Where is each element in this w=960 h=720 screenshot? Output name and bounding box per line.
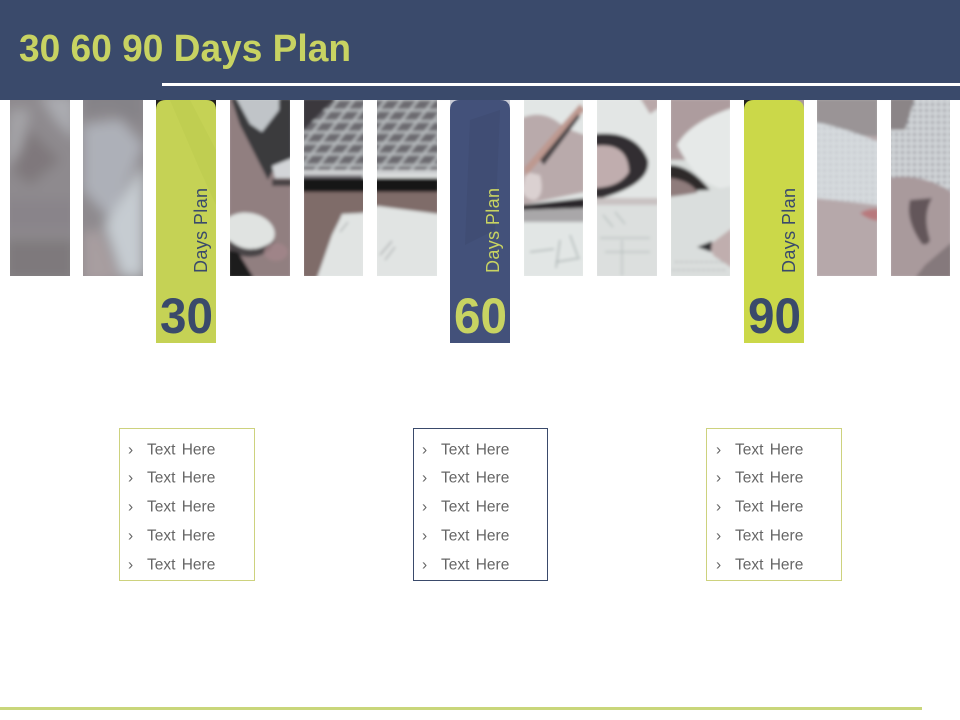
list box: 60 days: › (422, 470, 427, 486)
banner label: Days Plan (191, 188, 211, 273)
list box: 60 days: › (422, 528, 427, 544)
list box: 60 days: Text Here (441, 442, 509, 458)
header band (0, 0, 960, 100)
photo strip: cuff and pencil (669, 98, 732, 278)
banner: 60 days (450, 100, 510, 344)
title: 30 60 90 Days Plan (19, 28, 351, 70)
list box: 90 days: Text Here (735, 470, 803, 486)
list box: 30 days: Text Here (147, 442, 215, 458)
list box: 30 days: Text Here (147, 470, 215, 486)
photo strip: shirt and hand (815, 98, 879, 278)
list box: 90 days: › (716, 528, 721, 544)
list box: 90 days: Text Here (735, 528, 803, 544)
list box: 30 days: › (128, 528, 133, 544)
list box: 60 days: Text Here (441, 528, 509, 544)
list box: 30 days (120, 428, 254, 580)
banner label: Days Plan (483, 188, 503, 273)
list box: 30 days: Text Here (147, 556, 215, 574)
photo strips: laptop and hands on desk (10, 100, 950, 276)
photo strip: laptop lid and desk (230, 100, 290, 276)
banner label: Days Plan (779, 188, 799, 273)
list box: 90 days: › (716, 556, 721, 574)
list box: 60 days: Text Here (441, 498, 509, 516)
banner number: 30 (160, 288, 213, 344)
list box: 60 days: Text Here (441, 556, 509, 574)
banner number: 60 (454, 288, 507, 344)
banner number: 90 (748, 288, 801, 344)
list box: 90 days (706, 428, 842, 580)
list box: 30 days: Text Here (147, 498, 215, 516)
list box: 30 days: › (128, 498, 133, 516)
banner: 90 days (744, 100, 804, 344)
photo strip: keyboard and paper (302, 98, 439, 278)
list box: 60 days: › (422, 556, 427, 574)
list box: 30 days: › (128, 442, 133, 458)
list box: 90 days: Text Here (735, 442, 803, 458)
list box: 30 days: Text Here (147, 528, 215, 544)
list box: 90 days: › (716, 442, 721, 458)
list box: 90 days: Text Here (735, 556, 803, 574)
list box: 60 days: Text Here (441, 470, 509, 486)
banner: 30 days (156, 100, 216, 344)
photo strip: patterned shirt and fist (889, 98, 952, 278)
photo strip: blurred left area (10, 100, 143, 276)
list box: 90 days: › (716, 470, 721, 486)
list box: 60 days: › (422, 498, 427, 516)
list box: 30 days: › (128, 556, 133, 574)
list box: 30 days: › (128, 470, 133, 486)
photo strip: writing hand and pen (522, 98, 585, 278)
footer rule (0, 707, 922, 710)
photo strip: sleeve and notes (595, 98, 659, 278)
list box: 60 days (414, 428, 548, 580)
list box: 90 days: › (716, 498, 721, 516)
list box: 90 days: Text Here (735, 498, 803, 516)
list box: 60 days: › (422, 442, 427, 458)
header rule (162, 83, 960, 86)
